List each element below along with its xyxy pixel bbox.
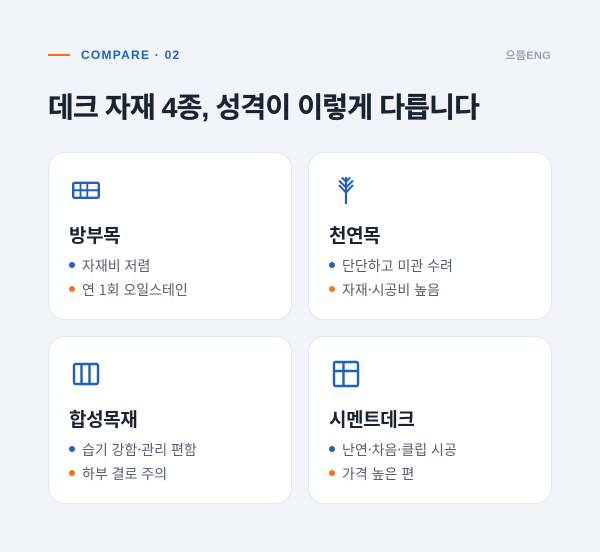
heading: 천연목: 천연목 — [329, 226, 380, 247]
icon: 시멘트데크 panel — [332, 360, 360, 388]
panel: 천연목 — [308, 152, 552, 320]
con: 가격 높은 편: 가격 높은 편 — [342, 464, 414, 484]
icon: 방부목 boards — [72, 182, 100, 199]
title: 데크 자재 4종, 성격이 이렇게 다릅니다 — [48, 92, 479, 123]
heading: 방부목: 방부목 — [69, 226, 120, 247]
con: 자재·시공비 높음: 자재·시공비 높음 — [342, 280, 440, 300]
pro: 단단하고 미관 수려: 단단하고 미관 수려 — [342, 256, 453, 276]
eyebrow label: COMPARE · 02 — [81, 48, 180, 62]
icon: 합성목재 planks — [72, 362, 100, 386]
brand label: 으뜸ENG — [505, 50, 551, 62]
accent line — [48, 54, 70, 56]
panel: 합성목재 — [48, 336, 292, 504]
heading: 시멘트데크: 시멘트데크 — [329, 410, 414, 431]
con: 하부 결로 주의: 하부 결로 주의 — [82, 464, 167, 484]
pro: 습기 강함·관리 편함: 습기 강함·관리 편함 — [82, 440, 197, 460]
con: 연 1회 오일스테인: 연 1회 오일스테인 — [82, 280, 188, 300]
heading: 합성목재: 합성목재 — [69, 410, 137, 431]
icon: 천연목 tree — [338, 176, 354, 204]
panel: 방부목 — [48, 152, 292, 320]
pro: 난연·차음·클립 시공: 난연·차음·클립 시공 — [342, 440, 457, 460]
panel: 시멘트데크 — [308, 336, 552, 504]
pro: 자재비 저렴: 자재비 저렴 — [82, 256, 150, 276]
